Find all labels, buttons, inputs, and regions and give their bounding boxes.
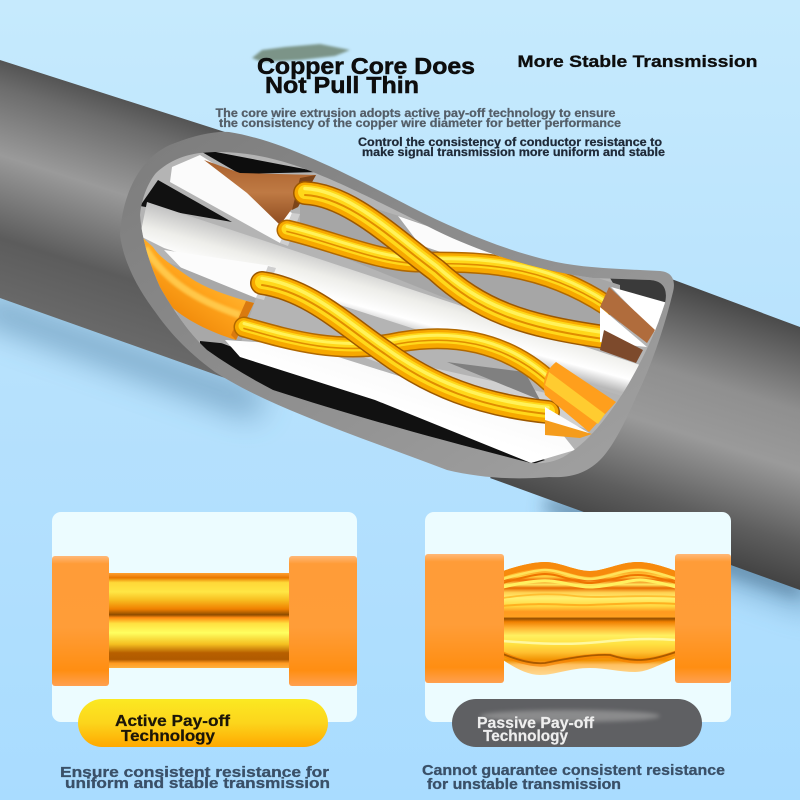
caption: active: Ensure consistent resistance for <box>60 764 329 781</box>
cut opening rim <box>120 132 674 478</box>
panel: passive pay-off <box>422 512 731 793</box>
cable shadow <box>0 305 800 598</box>
cable jacket: right <box>490 271 800 590</box>
pill label: passive pay-off: Passive Pay-off <box>477 715 595 732</box>
text block: conductor resistance: Control the consistency of conductor resistance to <box>358 137 662 149</box>
card background <box>425 512 731 722</box>
copper wire: orange strand D <box>244 324 550 384</box>
white pair strand: upper <box>170 155 292 243</box>
pill label: passive pay-off <box>452 699 702 747</box>
cable illustration <box>0 60 800 590</box>
text block: conductor resistance <box>358 137 665 159</box>
title smudge <box>252 44 350 62</box>
white pair strand: lower <box>164 250 272 298</box>
white band: lower <box>225 340 575 463</box>
text block: core wire extrusion: the consistency of the copper wire diameter for better performance <box>219 118 621 130</box>
right strand ends <box>544 287 668 438</box>
heading: more stable transmission: More Stable Transmission <box>518 53 758 71</box>
copper conductor: uniform <box>107 573 291 668</box>
panel: active pay-off <box>52 512 357 792</box>
pill label: passive pay-off: Technology <box>483 728 568 745</box>
inside of cable <box>140 152 666 464</box>
interior shadow <box>140 152 654 464</box>
pill label: active pay-off <box>78 699 328 747</box>
copper conductor: wavy <box>503 562 676 675</box>
copper wire: white-paired strand B <box>287 226 606 306</box>
orange sheath blocks <box>52 556 357 686</box>
caption: passive: Cannot guarantee consistent resistance <box>422 762 725 779</box>
caption: passive: for unstable transmission <box>427 776 621 793</box>
title <box>257 53 475 98</box>
text block: core wire extrusion: The core wire extrusion adopts active pay-off technology to ensure <box>216 108 616 120</box>
card background <box>52 512 357 722</box>
title: Copper Core Does <box>257 53 475 79</box>
copper wire: white-paired strand C <box>262 278 548 414</box>
white band: centre <box>140 202 640 398</box>
sheath collars <box>280 213 300 246</box>
caption: active <box>60 764 330 792</box>
text block: core wire extrusion <box>216 108 621 130</box>
pill label: active pay-off: Technology <box>121 728 215 745</box>
orange sheath blocks <box>425 554 731 683</box>
title: Not Pull Thin <box>265 72 419 98</box>
text block: conductor resistance: make signal transmission more uniform and stable <box>362 147 665 159</box>
brown sheath <box>204 160 316 225</box>
orange sheath <box>144 238 254 340</box>
cable jacket: left <box>0 60 240 378</box>
caption: passive <box>422 762 725 793</box>
copper wire: brown strand A <box>305 188 604 339</box>
caption: active: uniform and stable transmission <box>65 775 330 792</box>
pill label: active pay-off: Active Pay-off <box>115 713 231 730</box>
